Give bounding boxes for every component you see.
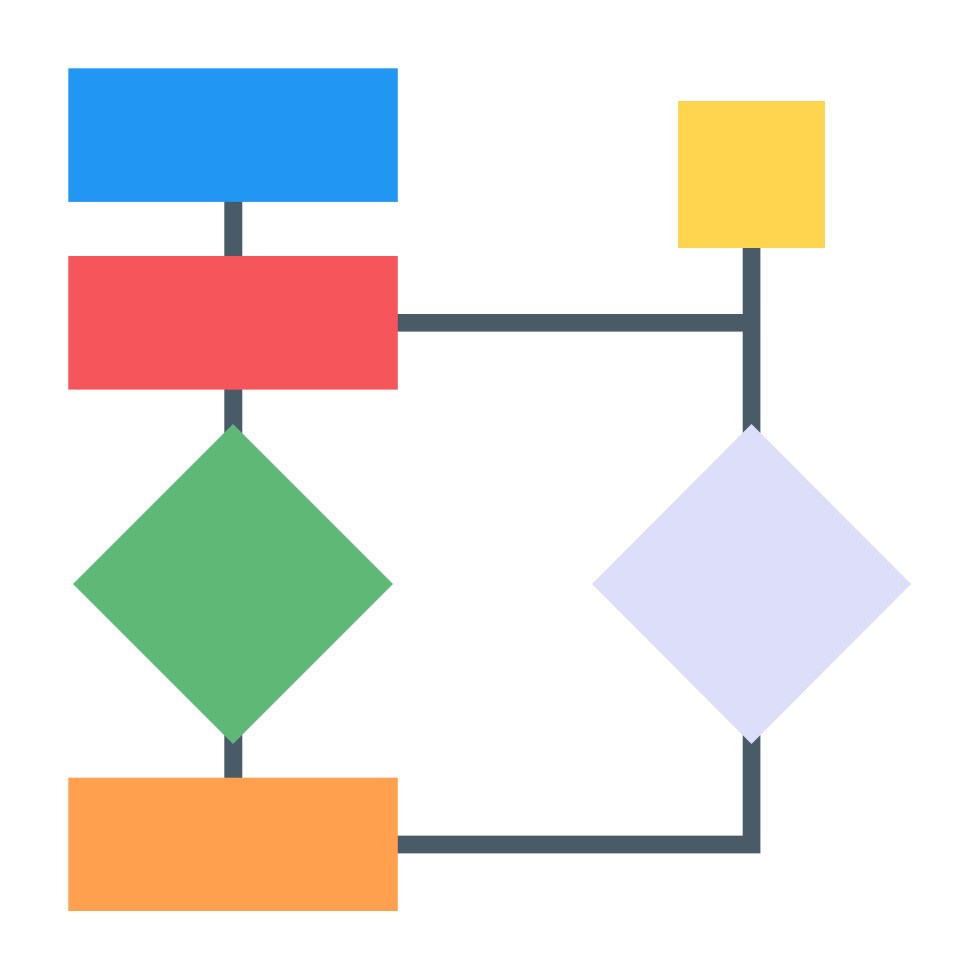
connector: red box to right column — [396, 314, 752, 332]
connector: blue box to orange box — [224, 200, 242, 780]
start square: yellow — [678, 101, 825, 248]
decision diamond: green — [73, 424, 393, 744]
decision diamond: lilac — [592, 424, 911, 744]
process box: orange — [68, 778, 398, 911]
connector: lilac diamond to orange box — [396, 735, 760, 853]
connector: yellow square to lilac diamond — [743, 246, 760, 436]
process box: red — [68, 256, 398, 390]
process box: blue — [68, 68, 398, 202]
